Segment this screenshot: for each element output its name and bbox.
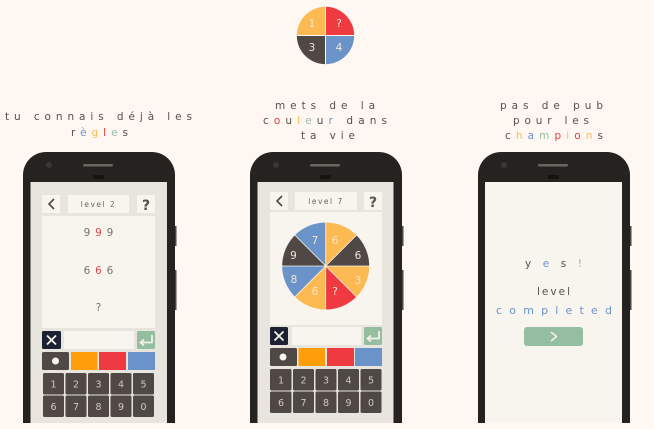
- phone 1: level 2: [23, 152, 176, 423]
- puzzle panel: [270, 212, 382, 325]
- phone 2: level 7: [250, 152, 404, 423]
- number pad: 7: [73, 402, 79, 413]
- next button: [524, 327, 583, 346]
- logo: four colour circle: 3: [309, 42, 315, 54]
- puzzle panel: 9: [95, 227, 102, 239]
- heading: pas de pub pour les champions: pour les: [513, 115, 589, 127]
- number pad: 5: [140, 380, 147, 390]
- puzzle panel: 9: [84, 227, 90, 239]
- pie chart puzzle: 8: [291, 274, 297, 286]
- number pad: 8: [95, 402, 102, 413]
- header buttons: ?: [369, 195, 377, 211]
- heading: tu connais déjà les règles: r è g l e s: [71, 127, 128, 139]
- heading: mets de la couleur dans ta vie: ta vie: [301, 130, 355, 142]
- answer row: [270, 327, 382, 345]
- puzzle panel: 6: [84, 265, 91, 277]
- number pad: 9: [118, 402, 124, 413]
- number pad: [270, 369, 382, 413]
- pie chart puzzle: 9: [290, 250, 297, 262]
- puzzle panel: [42, 216, 155, 328]
- logo: four colour circle: [296, 6, 355, 65]
- header buttons: [270, 192, 382, 211]
- heading: pas de pub pour les champions: c h a m p i o n s: [505, 130, 603, 142]
- header buttons: [42, 195, 155, 214]
- text: completed: completed: [496, 304, 612, 317]
- colour swatches: [42, 352, 155, 370]
- heading: mets de la couleur dans ta vie: mets de la: [275, 100, 375, 112]
- text: level: level: [537, 286, 570, 298]
- number pad: 3: [95, 380, 102, 390]
- puzzle panel: ?: [96, 302, 101, 314]
- number pad: 2: [300, 376, 307, 386]
- heading: pas de pub pour les champions: pas de pub: [500, 100, 603, 112]
- logo: four colour circle: ?: [336, 18, 342, 30]
- number pad: 8: [323, 398, 329, 409]
- pie chart puzzle: ?: [332, 286, 338, 298]
- pie chart puzzle: 7: [312, 235, 318, 247]
- number pad: 4: [345, 376, 352, 386]
- logo: four colour circle: 4: [336, 42, 343, 54]
- number pad: 3: [323, 376, 329, 386]
- puzzle panel: 6: [95, 265, 102, 277]
- heading: tu connais déjà les règles: tu connais déjà les: [5, 111, 192, 123]
- logo: four colour circle: 1: [309, 18, 315, 30]
- header buttons: ?: [142, 198, 150, 214]
- number pad: 2: [73, 380, 79, 390]
- heading: pas de pub pour les champions: [500, 100, 603, 142]
- number pad: 6: [50, 402, 57, 413]
- text: yes!: y e s !: [525, 258, 582, 270]
- pie chart puzzle: 6: [355, 250, 362, 262]
- number pad: 7: [300, 398, 307, 409]
- heading: mets de la couleur dans ta vie: c o u l e u r dans: [263, 115, 387, 127]
- number pad: [43, 373, 154, 417]
- header buttons: level 2: [81, 200, 116, 209]
- pie chart puzzle: 6: [332, 235, 339, 247]
- puzzle panel: 6: [107, 265, 114, 277]
- number pad: 0: [140, 402, 147, 413]
- number pad: 4: [118, 380, 124, 390]
- header buttons: level 7: [308, 197, 344, 206]
- pie chart puzzle: 6: [312, 286, 319, 298]
- number pad: 6: [278, 398, 284, 409]
- answer row: [42, 331, 155, 349]
- heading: mets de la couleur dans ta vie: [263, 100, 387, 142]
- number pad: 1: [50, 380, 57, 390]
- heading: tu connais déjà les règles: [5, 111, 192, 139]
- number pad: 1: [278, 376, 284, 386]
- colour swatches: [270, 348, 382, 366]
- phone 3: level completed: [478, 152, 632, 423]
- puzzle panel: 9: [107, 227, 113, 239]
- number pad: 5: [368, 376, 374, 386]
- number pad: 9: [345, 398, 352, 409]
- pie chart puzzle: [282, 222, 370, 310]
- number pad: 0: [368, 398, 374, 409]
- pie chart puzzle: 3: [355, 275, 361, 287]
